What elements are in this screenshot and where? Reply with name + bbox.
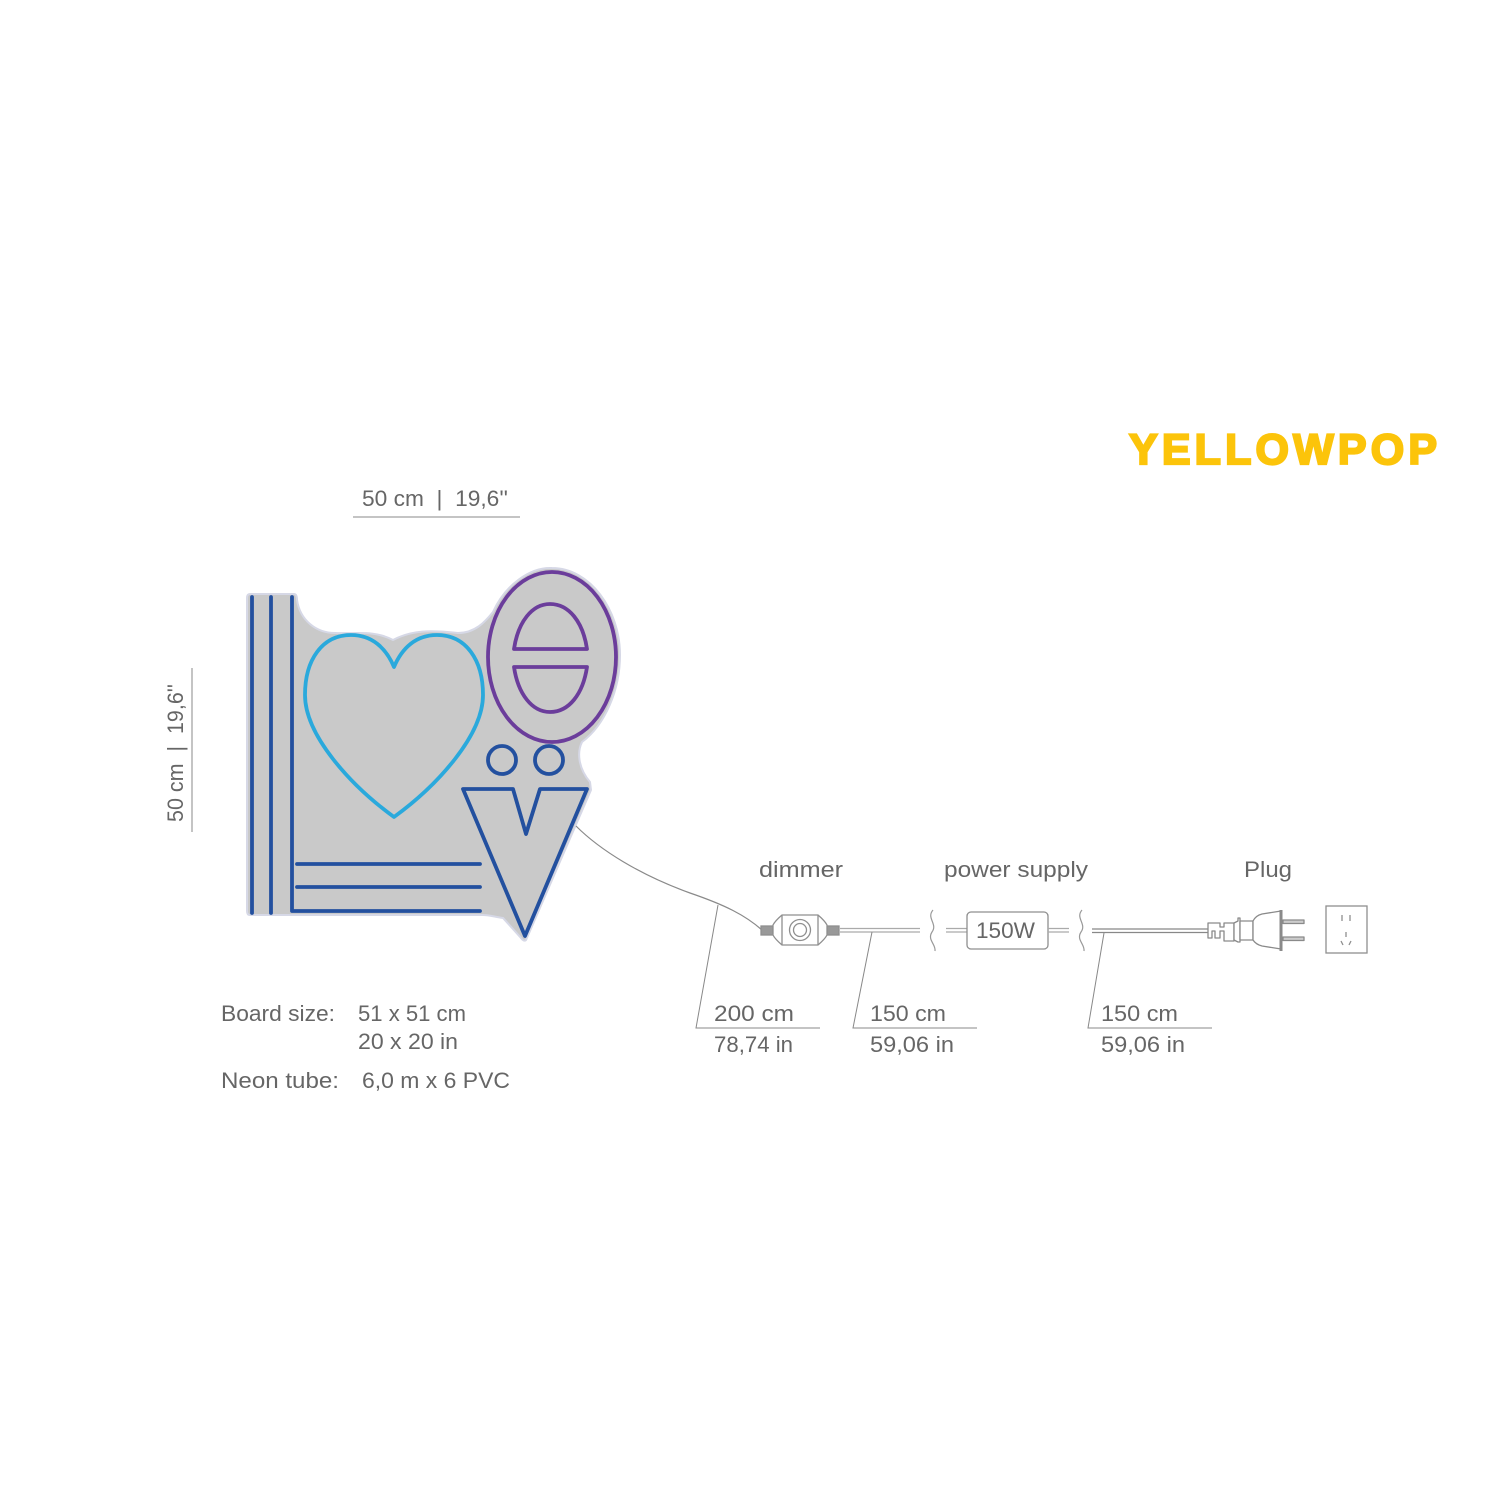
dimmer label: dimmer [759, 857, 843, 882]
neon tube spec [221, 1068, 510, 1093]
height dimension: 50 cm | 19,6'' [163, 684, 188, 822]
leader: 150 cm dimmer cable [853, 932, 977, 1057]
board size spec [221, 1001, 466, 1054]
icon: wall socket [1326, 906, 1367, 953]
leader: 150 cm dimmer cable: 150 cm [870, 1001, 946, 1026]
icon: power supply box [967, 912, 1048, 949]
logo: Yellowpop: YELLOWPOP [1129, 426, 1437, 474]
cable: dimmer to break [840, 928, 920, 932]
icon: cable break left [930, 910, 935, 951]
icon: cable break right [1079, 910, 1084, 951]
neon sign [247, 568, 620, 941]
leader: 150 cm plug cable: 150 cm [1101, 1001, 1178, 1026]
neon tube spec: Neon tube: [221, 1068, 339, 1093]
cable: break to plug [1092, 929, 1208, 932]
board size spec: 51 x 51 cm [358, 1001, 466, 1026]
icon: plug [1208, 910, 1304, 951]
cable stub into power supply [946, 928, 967, 932]
neon: L letter [252, 597, 480, 913]
neon tube spec: 6,0 m x 6 PVC [362, 1068, 510, 1093]
leader: 200 cm: 200 cm [714, 1001, 794, 1026]
neon: umlaut dots and V [463, 746, 587, 936]
power supply label: power supply [944, 857, 1088, 882]
cable stub out of power supply [1048, 928, 1069, 932]
backing board [247, 568, 620, 941]
width dimension: 50 cm | 19,6'' [362, 486, 508, 511]
neon: heart [305, 635, 483, 817]
plug label: Plug [1244, 857, 1292, 882]
leader: 150 cm plug cable [1088, 933, 1212, 1057]
icon: dimmer [761, 915, 839, 945]
cable from sign to dimmer [576, 826, 762, 930]
board size spec: 20 x 20 in [358, 1029, 458, 1054]
icon: power supply box: 150W [976, 918, 1035, 943]
leader: 200 cm: 78,74 in [714, 1032, 793, 1057]
leader: 150 cm plug cable: 59,06 in [1101, 1032, 1185, 1057]
leader: 200 cm [696, 905, 820, 1057]
board size spec: Board size: [221, 1001, 335, 1026]
neon: theta oval [488, 572, 616, 742]
leader: 150 cm dimmer cable: 59,06 in [870, 1032, 954, 1057]
